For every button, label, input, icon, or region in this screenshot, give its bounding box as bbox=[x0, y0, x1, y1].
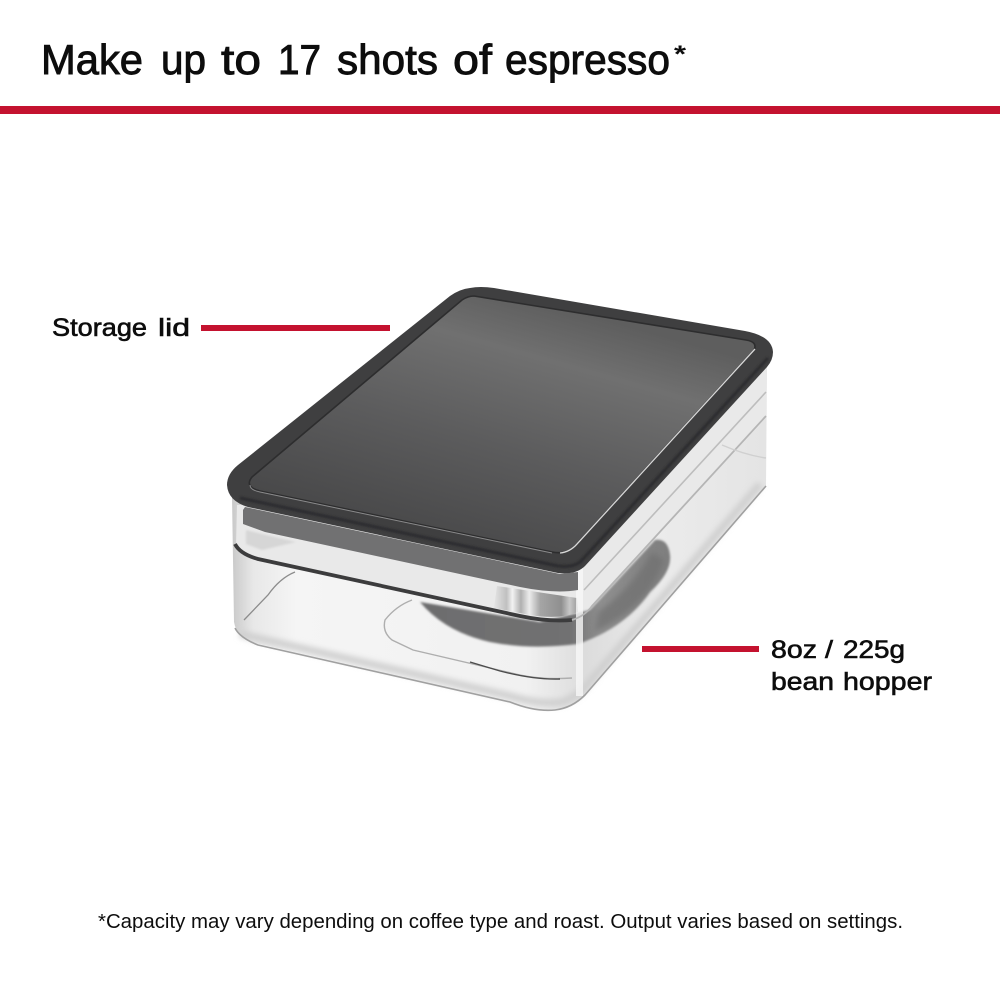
upper right inner line bbox=[584, 392, 766, 590]
recess dark contour bbox=[470, 662, 560, 679]
upper glass band bbox=[236, 360, 767, 622]
dark band beneath lid bbox=[243, 507, 578, 591]
lid front shadow edge bbox=[240, 358, 768, 566]
label: storage lid bbox=[52, 314, 390, 342]
label: bean hopper bbox=[642, 636, 932, 696]
product illustration: bean hopper with storage lid bbox=[227, 287, 773, 710]
capacity text bbox=[771, 636, 905, 664]
front seam line bbox=[235, 544, 572, 620]
title: Make bbox=[41, 36, 143, 83]
bean hopper text: bean bbox=[771, 668, 834, 696]
title: to bbox=[221, 36, 261, 83]
hopper body bbox=[232, 365, 767, 710]
title: espresso bbox=[505, 36, 670, 83]
recess front highlight bbox=[250, 485, 552, 553]
hopper base edge bbox=[235, 486, 766, 710]
base shading bbox=[240, 484, 760, 703]
capacity text: 225g bbox=[843, 636, 905, 664]
capacity text: 8oz bbox=[771, 636, 817, 664]
left base contour bbox=[244, 572, 295, 620]
title bbox=[41, 36, 687, 83]
recess right highlight bbox=[560, 349, 755, 553]
red header rule bbox=[0, 106, 1000, 114]
lid outer rim bbox=[227, 287, 773, 573]
bean hopper leader line bbox=[642, 646, 759, 652]
recess outline in base bbox=[384, 600, 572, 679]
storage lid text bbox=[52, 314, 190, 342]
dark inner bowl bbox=[420, 540, 670, 647]
capacity text: / bbox=[825, 636, 833, 664]
storage lid text: lid bbox=[158, 314, 190, 342]
left glass reflection bbox=[246, 530, 296, 550]
right base contour bbox=[722, 445, 766, 458]
title: * bbox=[674, 41, 687, 68]
title: shots bbox=[337, 36, 438, 83]
storage lid leader line bbox=[201, 325, 390, 331]
right seam line bbox=[572, 416, 766, 620]
vertical corner highlight bbox=[576, 566, 583, 696]
bean hopper text: hopper bbox=[843, 668, 932, 696]
title: 17 bbox=[278, 36, 321, 83]
bean hopper text bbox=[771, 668, 932, 696]
glass reflections under lid bbox=[494, 586, 578, 617]
lid inner recess bbox=[249, 296, 755, 553]
title: up bbox=[161, 36, 206, 83]
bowl shade bbox=[595, 552, 664, 632]
storage lid text: Storage bbox=[52, 314, 147, 342]
title: of bbox=[453, 36, 492, 83]
footnote: *Capacity may vary depending on coffee type and roast. Output varies based on settings. bbox=[98, 911, 903, 933]
